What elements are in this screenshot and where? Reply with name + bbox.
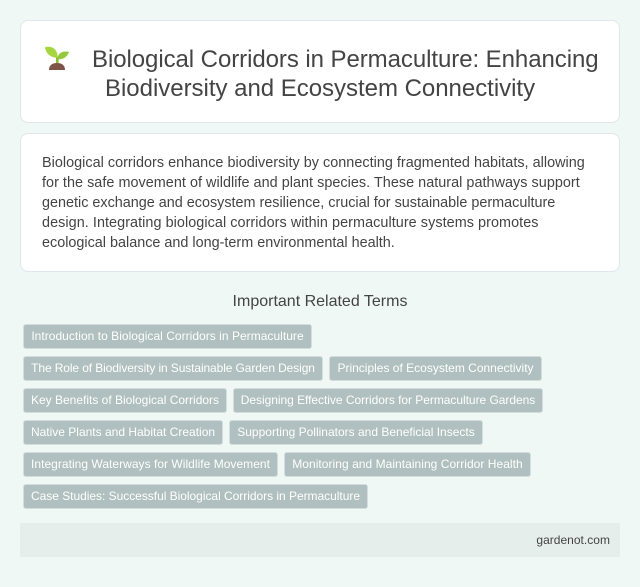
footer source text: gardenot.com xyxy=(536,533,610,547)
tag xyxy=(23,356,323,381)
section heading: Important Related Terms xyxy=(233,293,407,310)
tag xyxy=(23,420,223,445)
tag xyxy=(23,484,368,509)
title line 2: Biodiversity and Ecosystem Connectivity xyxy=(105,75,535,102)
tag xyxy=(284,452,531,477)
tag: Case Studies: Successful Biological Corridors in Permaculture xyxy=(31,489,360,503)
tag: Key Benefits of Biological Corridors xyxy=(31,393,219,407)
description text: genetic exchange and ecosystem resilience, crucial for sustainable permaculture xyxy=(42,195,555,211)
tag list xyxy=(23,324,543,509)
description text: for the safe movement of wildlife and plant species. These natural pathways support xyxy=(42,175,580,191)
tag: Principles of Ecosystem Connectivity xyxy=(337,361,534,375)
tag: Native Plants and Habitat Creation xyxy=(31,425,215,439)
header card xyxy=(20,20,620,123)
tag: Supporting Pollinators and Beneficial Insects xyxy=(237,425,475,439)
tag: Introduction to Biological Corridors in Permaculture xyxy=(31,329,304,343)
tag xyxy=(329,356,542,381)
description text xyxy=(42,155,585,251)
title line 1: Biological Corridors in Permaculture: Enhancing xyxy=(92,46,599,73)
tag: The Role of Biodiversity in Sustainable Garden Design xyxy=(31,361,315,375)
tag xyxy=(229,420,483,445)
tag xyxy=(23,388,227,413)
tag xyxy=(233,388,543,413)
description text: design. Integrating biological corridors within permaculture systems promotes xyxy=(42,215,539,231)
description text: Biological corridors enhance biodiversity by connecting fragmented habitats, allowing xyxy=(42,155,585,171)
description text: ecological balance and long-term environmental health. xyxy=(42,235,395,251)
footer bar xyxy=(20,523,620,557)
tag xyxy=(23,324,312,349)
tag: Integrating Waterways for Wildlife Movement xyxy=(31,457,270,471)
tag: Designing Effective Corridors for Permaculture Gardens xyxy=(241,393,535,407)
icon: seedling xyxy=(45,46,69,70)
description card xyxy=(20,133,620,272)
tag xyxy=(23,452,278,477)
tag: Monitoring and Maintaining Corridor Health xyxy=(292,457,523,471)
